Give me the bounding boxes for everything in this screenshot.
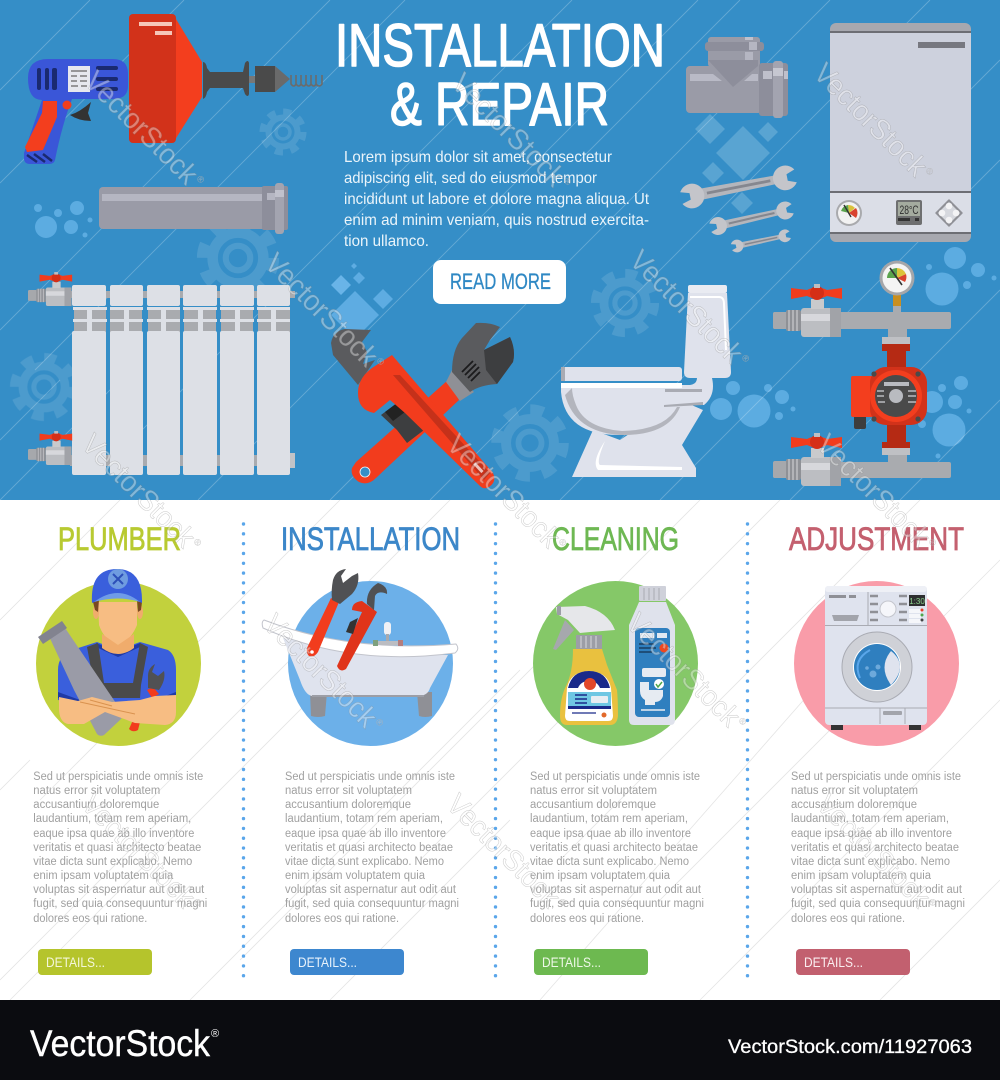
icon: spanners	[677, 163, 801, 254]
diagonal watermark lines	[0, 0, 1000, 500]
icon: washing machine: 1:30	[909, 597, 925, 606]
icon: crossed wrenches	[331, 323, 514, 488]
icon: toilet	[561, 285, 731, 477]
bottom white panel	[0, 500, 1000, 1000]
background bubbles	[34, 201, 996, 458]
heading: plumber: PLUMBER	[58, 521, 181, 557]
icon: plumber figure	[36, 569, 201, 746]
boiler display	[896, 200, 922, 225]
details button: cleaning: DETAILS...	[542, 954, 601, 970]
details button: installation: DETAILS...	[298, 954, 357, 970]
icon: drain cleaning machine	[24, 14, 322, 164]
icon: bathtub with wrenches	[262, 569, 458, 746]
heading: installation: INSTALLATION	[281, 521, 460, 557]
icon: circulation pump	[773, 260, 951, 486]
details button: plumber: DETAILS...	[46, 954, 105, 970]
details button: adjustment: DETAILS...	[804, 954, 863, 970]
body text: installation	[285, 771, 459, 925]
footer bar: ®	[211, 1028, 219, 1040]
heading: adjustment: ADJUSTMENT	[789, 521, 964, 557]
body text: cleaning	[530, 771, 704, 925]
panel: adjustment	[789, 521, 965, 975]
footer logo: VectorStock	[30, 1023, 210, 1064]
details button: cleaning	[534, 949, 648, 975]
intro paragraph: Lorem ipsum dolor sit amet, consectetur	[344, 149, 613, 166]
details button: installation	[290, 949, 404, 975]
boiler display: 28°C	[900, 205, 918, 217]
pipe wrench	[331, 329, 494, 488]
body text: plumber	[33, 771, 207, 925]
icon: radiator	[28, 272, 295, 475]
title: INSTALLATION	[335, 12, 665, 79]
details button: adjustment	[796, 949, 910, 975]
bottle	[629, 602, 675, 725]
background gears	[15, 112, 654, 476]
icon: grey pipe	[99, 183, 288, 234]
icon: washing machine	[794, 581, 959, 746]
footer bar	[0, 1000, 1000, 1080]
footer image id: VectorStock.com/11927063	[728, 1037, 972, 1058]
icon: T pipe fitting	[686, 37, 788, 118]
intro paragraph: adipiscing elit, sed do eiusmod tempor	[344, 170, 598, 187]
intro paragraph	[344, 149, 650, 250]
icon: cleaning products	[533, 581, 698, 746]
background diamonds	[695, 114, 778, 214]
heading: cleaning: CLEANING	[552, 521, 679, 557]
body text: adjustment	[791, 771, 965, 925]
pressure gauge	[880, 260, 914, 313]
header panel	[0, 0, 1000, 500]
panel: installation	[262, 521, 460, 975]
adjustable wrench	[352, 323, 514, 483]
intro paragraph: incididunt ut labore et dolore magna aliqua. Ut	[344, 191, 650, 208]
boiler controls	[936, 200, 962, 226]
details button: plumber	[38, 949, 152, 975]
read more button: READ MORE	[450, 269, 551, 294]
watermark text	[75, 57, 942, 921]
boiler gauge	[836, 200, 862, 226]
intro paragraph: tion ullamco.	[344, 233, 429, 250]
icon: wall boiler	[830, 23, 971, 242]
dotted dividers	[244, 524, 748, 978]
intro paragraph: enim ad minim veniam, quis nostrud exercita-	[344, 212, 649, 229]
panel: plumber	[33, 521, 207, 975]
title	[335, 12, 665, 138]
title: & REPAIR	[390, 71, 609, 138]
panel: cleaning	[530, 521, 704, 975]
read more button	[433, 260, 566, 304]
spray	[556, 606, 615, 633]
